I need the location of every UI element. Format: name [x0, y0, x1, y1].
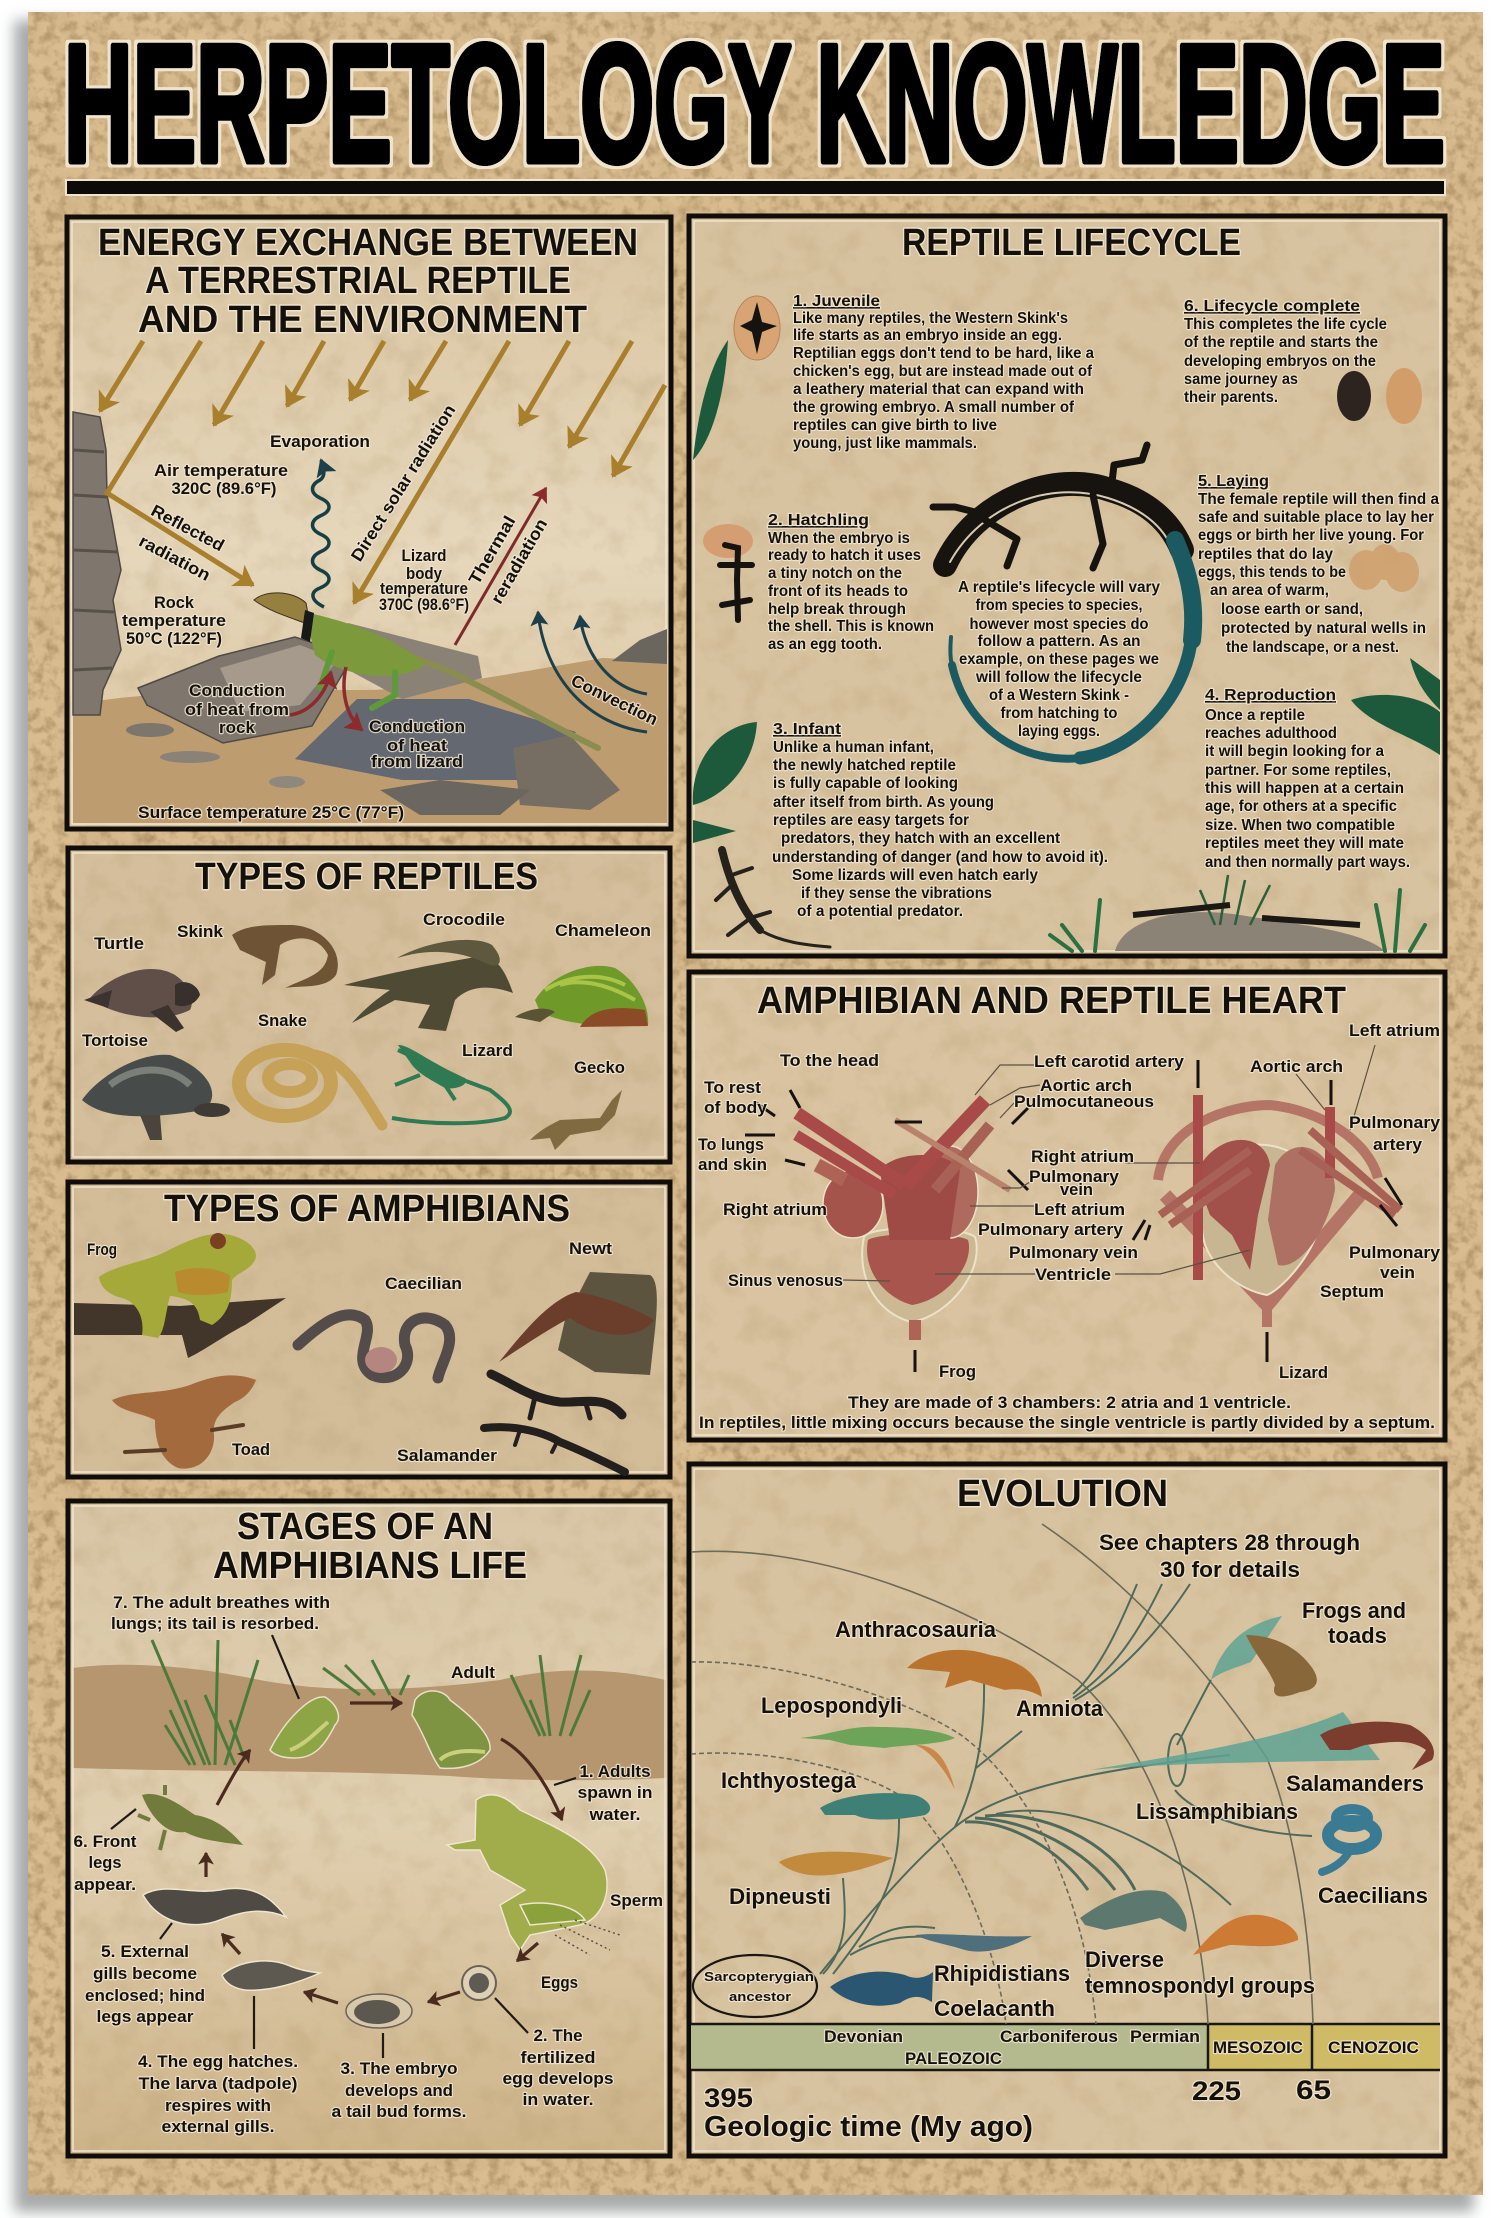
lifecycle complete text: same journey as [1184, 371, 1298, 388]
hatchling text: ready to hatch it uses [768, 547, 921, 564]
stage labels: appear. [74, 1875, 136, 1894]
evolution labels: Salamanders [1286, 1771, 1424, 1796]
icon: sperm and eggs [555, 1920, 620, 1955]
stage labels [74, 1593, 663, 2136]
stage labels: respires with [165, 2096, 271, 2115]
icon: frog right [412, 1691, 490, 1768]
heart heading: AMPHIBIAN AND REPTILE HEART [757, 980, 1346, 1022]
energy heading [98, 222, 638, 341]
icon: temnospondyl orange [1193, 1915, 1298, 1955]
lifecycle complete text: developing embryos on the [1184, 353, 1376, 370]
icon: frog and toad [1246, 1635, 1317, 1696]
reptile labels: Crocodile [423, 910, 505, 929]
energy heading: AND THE ENVIRONMENT [138, 299, 587, 341]
hatchling text: as an egg tooth. [768, 636, 882, 653]
rock cliff [73, 412, 121, 715]
evaporation wave arrow [312, 460, 329, 607]
laying text [1198, 473, 1439, 656]
heart labels: Pulmocutaneous [1014, 1092, 1154, 1111]
energy labels: 370C (98.6°F) [379, 595, 469, 614]
panel: reptile lifecycle [689, 216, 1445, 956]
heart labels [698, 1021, 1441, 1432]
reproduction text: Once a reptile [1205, 707, 1305, 724]
laying text: The female reptile will then find a [1198, 491, 1439, 508]
infant text: understanding of danger (and how to avoid it). [772, 849, 1108, 866]
stage labels: egg develops [502, 2069, 614, 2088]
heart labels: artery [1373, 1135, 1423, 1154]
leader lines [111, 1635, 576, 2058]
teal radiation wedges [1090, 1616, 1380, 1770]
energy labels: Reflected [148, 501, 227, 555]
icon: lepospondyl [800, 1727, 955, 1748]
conduction arrows [290, 667, 362, 730]
infant text: the newly hatched reptile [773, 757, 956, 774]
hatchling text: the shell. This is known [768, 618, 934, 635]
stage labels: Sperm [610, 1891, 663, 1910]
laying text: loose earth or sand, [1221, 601, 1363, 618]
energy labels: Convection [568, 671, 661, 729]
juvenile text: a leathery material that can expand with [793, 381, 1084, 398]
energy labels: reradiation [487, 515, 551, 607]
laying text: eggs or birth her live young. For [1198, 527, 1424, 544]
icon: temnospondyl grey [1080, 1890, 1187, 1932]
icon: tortoise [82, 1055, 230, 1140]
stage labels: 6. Front [74, 1832, 137, 1851]
evolution heading: EVOLUTION [957, 1473, 1168, 1515]
reptile labels: Tortoise [82, 1031, 148, 1050]
lizard [254, 593, 598, 748]
icon: toad [112, 1375, 256, 1469]
icon: laying eggs [1349, 544, 1419, 592]
heart labels: They are made of 3 chambers: 2 atria and 1 ventricle. [848, 1393, 1291, 1412]
juvenile text: chicken's egg, but are instead made out of [793, 363, 1093, 380]
energy heading: ENERGY EXCHANGE BETWEEN [98, 222, 638, 264]
energy labels: Air temperature [154, 461, 288, 480]
evolution labels: Geologic time (My ago) [704, 2111, 1033, 2143]
laying text: 5. Laying [1198, 473, 1269, 490]
central text [958, 579, 1160, 740]
heart labels: Pulmonary [1029, 1167, 1120, 1186]
lizard heart diagram [1133, 1060, 1402, 1362]
heart labels: vein [1060, 1180, 1093, 1199]
evolution labels: Carboniferous [1000, 2027, 1118, 2046]
infant text: Some lizards will even hatch early [792, 867, 1038, 884]
panel: amphibian and reptile heart [689, 972, 1445, 1440]
evolution labels: See chapters 28 through [1099, 1530, 1360, 1555]
central text: laying eggs. [1018, 723, 1100, 740]
evolution labels: Lissamphibians [1136, 1799, 1298, 1824]
heart labels: Septum [1320, 1282, 1384, 1301]
convection arrows [538, 612, 647, 732]
title rule [66, 180, 1445, 195]
energy labels: Thermal [465, 513, 519, 588]
hatchling text [768, 512, 934, 653]
icon: tadpole 2 [143, 1888, 286, 1925]
heart labels: vein [1380, 1263, 1415, 1282]
icon: ichthyostega [820, 1793, 930, 1820]
stage labels: spawn in [578, 1783, 652, 1802]
energy labels: radiation [136, 531, 213, 585]
infant text: 3. Infant [773, 721, 842, 738]
icon: newt on rock [499, 1272, 657, 1375]
evolution labels: Permian [1130, 2027, 1200, 2046]
stage labels: external gills. [162, 2117, 274, 2136]
reptile labels: Skink [177, 922, 224, 941]
heart labels: Left carotid artery [1034, 1052, 1185, 1071]
evolution labels: Sarcopterygian [704, 1969, 814, 1984]
stage labels: 4. The egg hatches. [138, 2052, 298, 2071]
central text: of a Western Skink - [989, 687, 1129, 704]
stage labels: 2. The [534, 2026, 582, 2045]
evolution labels: Amniota [1016, 1696, 1104, 1721]
stage labels: fertilized [520, 2048, 596, 2067]
evolution labels: Rhipidistians [934, 1961, 1070, 1986]
evolution labels: Coelacanth [934, 1996, 1055, 2021]
laying text: reptiles that do lay [1198, 546, 1333, 563]
stage labels: a tail bud forms. [332, 2102, 466, 2121]
time boundary curves [691, 1524, 1313, 2024]
evolution labels: toads [1328, 1623, 1387, 1648]
evolution labels: Devonian [824, 2027, 903, 2046]
reproduction text: reptiles meet they will mate [1205, 835, 1404, 852]
icon: turtle [84, 969, 200, 1032]
amphibian labels: Newt [569, 1239, 612, 1258]
energy labels: of heat from [185, 700, 289, 719]
heart labels: Frog [939, 1362, 976, 1381]
icon: anthracosauria [907, 1650, 1042, 1697]
hatchling text: a tiny notch on the [768, 565, 902, 582]
stage labels: 1. Adults [580, 1762, 650, 1781]
central text: follow a pattern. As an [978, 633, 1140, 650]
geologic band [691, 2024, 1440, 2070]
reptile labels: Gecko [574, 1058, 625, 1077]
energy labels: Rock [154, 593, 195, 612]
evolution labels: ancestor [729, 1989, 791, 2004]
evolution labels: Diverse [1085, 1947, 1164, 1972]
energy labels: body [406, 564, 442, 583]
central text: from hatching to [1000, 705, 1118, 722]
heart labels: Aortic arch [1250, 1057, 1343, 1076]
energy labels: 50°C (122°F) [126, 629, 222, 648]
heart labels: To the head [780, 1051, 879, 1070]
panel: energy exchange [67, 217, 671, 829]
icon: skink legs [933, 445, 1147, 568]
icon: caecilian eggs [365, 1347, 397, 1373]
energy labels: Surface temperature 25°C (77°F) [138, 803, 404, 822]
icon: chameleon [515, 966, 648, 1027]
evolution labels: PALEOZOIC [905, 2049, 1002, 2068]
heart labels: Right atrium [723, 1200, 827, 1219]
heart labels: Right atrium [1031, 1147, 1134, 1166]
heart labels: Pulmonary artery [978, 1220, 1124, 1239]
stage labels: lungs; its tail is resorbed. [111, 1614, 319, 1633]
leaves and foliage [693, 340, 1440, 843]
heart labels: Pulmonary vein [1009, 1243, 1138, 1262]
icon: grass and rock [1050, 875, 1425, 951]
amphibian labels: Toad [232, 1440, 270, 1459]
evolution labels: Caecilians [1318, 1883, 1428, 1908]
heart labels: Left atrium [1034, 1200, 1125, 1219]
energy heading: A TERRESTRIAL REPTILE [145, 260, 571, 302]
reproduction text: 4. Reproduction [1205, 687, 1336, 704]
frog heart diagram [745, 1090, 1028, 1372]
lifecycle complete text [1184, 298, 1387, 406]
ground band [73, 1665, 666, 1780]
reptile labels: Snake [258, 1011, 307, 1030]
icon: froglet [138, 1785, 243, 1850]
juvenile text: young, just like mammals. [793, 435, 977, 452]
laying text: an area of warm, [1210, 582, 1329, 599]
energy labels: rock [219, 718, 256, 737]
energy labels: temperature [380, 579, 468, 598]
infant text: is fully capable of looking [773, 775, 958, 792]
icon: branch [74, 1298, 286, 1358]
energy labels: from lizard [371, 752, 463, 771]
juvenile text: Reptilian eggs don't tend to be hard, like a [793, 345, 1094, 362]
infant text: reptiles are easy targets for [773, 812, 969, 829]
lifecycle complete text: 6. Lifecycle complete [1184, 298, 1360, 315]
solar radiation arrows [100, 341, 665, 603]
icon: western skink ring [945, 484, 1193, 759]
stages heading [213, 1506, 527, 1587]
icon: frog left [270, 1697, 338, 1758]
reproduction text: it will begin looking for a [1205, 743, 1384, 760]
energy labels: 320C (89.6°F) [172, 479, 276, 498]
heart labels: Left atrium [1349, 1021, 1440, 1040]
heart labels: of body [704, 1098, 768, 1117]
icon: dipneusti fish [779, 1852, 893, 1876]
reptile labels: Turtle [94, 934, 144, 953]
juvenile text: life starts as an embryo inside an egg. [793, 327, 1062, 344]
heart labels: To lungs [698, 1135, 764, 1154]
icon: lizard [392, 1045, 510, 1123]
stage labels: 5. External [101, 1942, 189, 1961]
stages heading: AMPHIBIANS LIFE [213, 1545, 527, 1587]
icon: ancestor ellipse [693, 1955, 817, 2017]
reptile labels: Chameleon [555, 921, 651, 940]
heart labels: and skin [698, 1155, 767, 1174]
icon: egg with embryo [734, 296, 780, 360]
grass clumps [152, 1640, 590, 1765]
energy labels: Conduction [189, 681, 285, 700]
lifecycle heading: REPTILE LIFECYCLE [902, 222, 1241, 264]
heart labels: In reptiles, little mixing occurs because the single ventricle is partly divided by a septum. [699, 1413, 1435, 1432]
stage labels: Adult [451, 1663, 495, 1682]
reproduction text: this will happen at a certain [1205, 780, 1404, 797]
stage labels: Eggs [541, 1973, 578, 1992]
evolution labels: MESOZOIC [1213, 2038, 1303, 2057]
icon: crocodile [344, 940, 513, 1031]
icon: rhipidistian [915, 1934, 1032, 1952]
icon: salamander [1320, 1722, 1434, 1770]
energy labels: of heat [387, 736, 447, 755]
hatchling text: front of its heads to [768, 583, 908, 600]
heart labels: Ventricle [1035, 1265, 1111, 1284]
icon: coiled caecilian [1322, 1809, 1376, 1872]
infant text: after itself from birth. As young [773, 794, 994, 811]
ground [73, 658, 667, 823]
amphibian labels: Salamander [397, 1446, 497, 1465]
stage labels: enclosed; hind [85, 1986, 205, 2005]
phylogeny tree branches [820, 1584, 1312, 1974]
heart labels: Pulmonary [1349, 1113, 1441, 1132]
juvenile text: the growing embryo. A small number of [793, 399, 1075, 416]
heart labels: Sinus venosus [728, 1271, 843, 1290]
amphibian labels: Frog [87, 1240, 117, 1259]
evolution labels: 225 [1192, 2076, 1241, 2106]
infant text: of a potential predator. [797, 903, 963, 920]
stage labels: in water. [522, 2090, 594, 2109]
energy labels: Evaporation [270, 432, 370, 451]
amphibians heading: TYPES OF AMPHIBIANS [164, 1188, 570, 1230]
stage labels: water. [588, 1805, 640, 1824]
icon: gecko [530, 1090, 622, 1150]
evolution labels: CENOZOIC [1328, 2038, 1419, 2057]
reproduction text: age, for others at a specific [1205, 798, 1397, 815]
heart labels: Aortic arch [1040, 1076, 1132, 1095]
heart labels: To rest [704, 1078, 761, 1097]
energy labels: Conduction [369, 717, 465, 736]
icon: caecilian [298, 1315, 450, 1378]
amphibian labels [87, 1239, 612, 1465]
stage labels: legs [88, 1853, 122, 1872]
lifecycle complete text: This completes the life cycle [1184, 316, 1387, 333]
icon: dark and pale eggs [1337, 368, 1422, 424]
stage labels: 3. The embryo [340, 2059, 458, 2078]
evolution labels: Dipneusti [729, 1884, 831, 1909]
reproduction text [1205, 687, 1410, 871]
rocks [126, 623, 620, 815]
energy labels [122, 401, 661, 822]
icon: fertilized egg [462, 1966, 496, 2000]
panel: stages of an amphibian's life [68, 1501, 670, 2156]
cycle arrows [206, 1703, 562, 2003]
central text: however most species do [970, 616, 1149, 633]
reptile labels: Lizard [462, 1041, 513, 1060]
lifecycle complete text: of the reptile and starts the [1184, 334, 1378, 351]
reptiles heading: TYPES OF REPTILES [195, 856, 538, 898]
icon: skink [232, 925, 338, 988]
icon: hatching egg [703, 524, 753, 620]
stage labels: legs appear [96, 2007, 194, 2026]
evolution labels: Frogs and [1302, 1598, 1406, 1623]
laying text: protected by natural wells in [1221, 620, 1426, 637]
evolution labels: Anthracosauria [835, 1617, 997, 1642]
central text: will follow the lifecycle [975, 669, 1142, 686]
reproduction text: and then normally part ways. [1205, 854, 1410, 871]
infant text: if they sense the vibrations [801, 885, 992, 902]
evolution labels: Lepospondyli [761, 1693, 902, 1718]
juvenile text: Like many reptiles, the Western Skink's [793, 310, 1068, 327]
juvenile text: 1. Juvenile [793, 293, 880, 310]
icon: embryo [346, 1994, 412, 2028]
icon: big frog [447, 1795, 607, 1950]
energy labels: Lizard [402, 546, 446, 565]
icon: snake [239, 1050, 382, 1125]
central text: from species to species, [976, 597, 1142, 614]
panel: types of amphibians [68, 1182, 670, 1477]
hatchling text: When the embryo is [768, 530, 910, 547]
evolution labels: temnospondyl groups [1085, 1973, 1315, 1998]
laying text: eggs, this tends to be [1198, 564, 1346, 581]
evolution labels: 65 [1296, 2075, 1331, 2105]
stages heading: STAGES OF AN [237, 1506, 493, 1548]
stage labels: 7. The adult breathes with [113, 1593, 330, 1612]
icon: lepospondyl fan [915, 1745, 955, 1790]
distant rock [612, 629, 667, 664]
juvenile text: reptiles can give birth to live [793, 417, 997, 434]
lifecycle complete text: their parents. [1184, 389, 1278, 406]
central text: A reptile's lifecycle will vary [958, 579, 1160, 596]
stage labels: The larva (tadpole) [138, 2074, 298, 2093]
hatchling text: 2. Hatchling [768, 512, 869, 529]
panel: evolution [689, 1464, 1445, 2156]
heart labels: Lizard [1279, 1363, 1328, 1382]
reptile labels [82, 910, 651, 1077]
infant text [772, 721, 1108, 920]
icon: coelacanth [830, 1972, 933, 2006]
panel: types of reptiles [68, 848, 670, 1162]
reproduction text: partner. For some reptiles, [1205, 762, 1391, 779]
icon: frog [99, 1233, 256, 1338]
energy labels: temperature [122, 611, 226, 630]
icon: small lizard [716, 850, 830, 947]
energy labels: Direct solar radiation [347, 401, 459, 565]
laying text: safe and suitable place to lay her [1198, 509, 1434, 526]
evolution labels: Ichthyostega [721, 1768, 857, 1793]
evolution labels: 395 [704, 2083, 753, 2113]
stage labels: develops and [345, 2081, 453, 2100]
central text: example, on these pages we [959, 651, 1159, 668]
heart labels: Pulmonary [1349, 1243, 1441, 1262]
juvenile text [793, 293, 1094, 452]
laying text: the landscape, or a nest. [1226, 639, 1399, 656]
heart leader lines [843, 1045, 1375, 1281]
thermal reradiation arrow [455, 488, 546, 645]
infant text: predators, they hatch with an excellent [781, 830, 1061, 847]
icon: salamanders [484, 1374, 625, 1472]
evolution labels [704, 1530, 1428, 2143]
reproduction text: size. When two compatible [1205, 817, 1395, 834]
stage labels: gills become [93, 1964, 197, 1983]
icon: tadpole 1 [222, 1961, 320, 1990]
infant text: Unlike a human infant, [773, 739, 934, 756]
hatchling text: help break through [768, 601, 906, 618]
amphibian labels: Caecilian [385, 1274, 462, 1293]
reproduction text: reaches adulthood [1205, 725, 1337, 742]
evolution labels: 30 for details [1160, 1557, 1300, 1582]
